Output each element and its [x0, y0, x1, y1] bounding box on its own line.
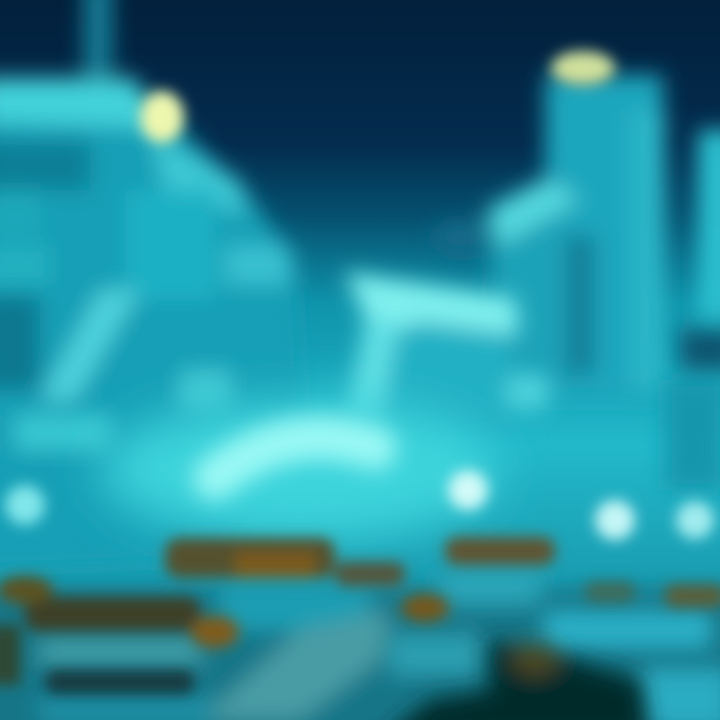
light: yellow glow on right tower [551, 51, 615, 85]
lights: bright glowing dots [5, 470, 714, 540]
light: yellow glow on left tower [140, 91, 184, 143]
building: far right tower [665, 130, 720, 490]
shadow: dark foreground base [380, 640, 650, 720]
coins: gold stacks [0, 537, 720, 694]
building: left tower block [0, 0, 305, 570]
ground: lower teal band [0, 570, 720, 720]
building: right tower [434, 75, 665, 400]
glow: central light arc [100, 400, 500, 540]
building: central low block [345, 272, 552, 430]
